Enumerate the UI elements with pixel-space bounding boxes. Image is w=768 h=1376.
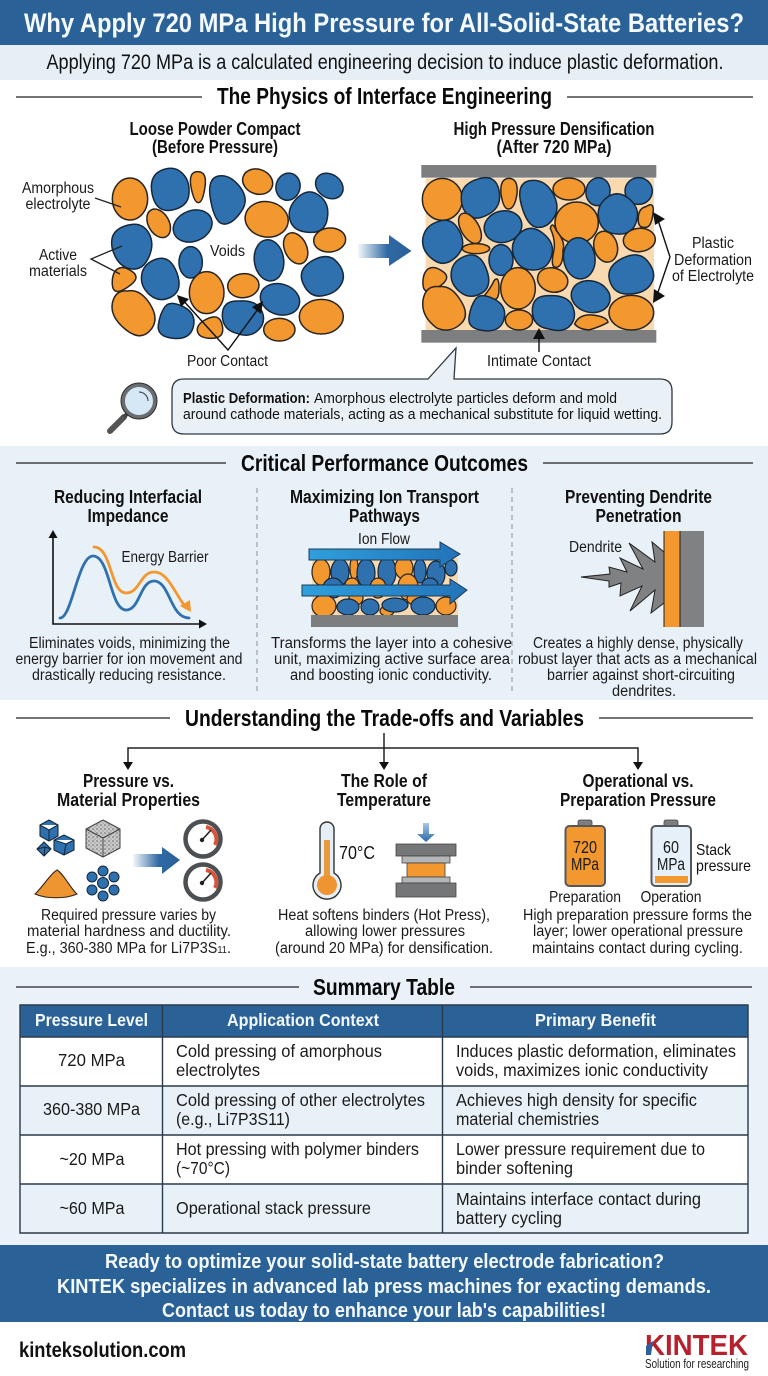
text: Eliminates voids, minimizing the	[29, 635, 230, 652]
heading: Maximizing Ion Transport	[290, 487, 479, 507]
row: 360-380 MPa	[43, 1090, 697, 1129]
call to action banner: Ready to optimize your solid-state battery electrode fabrication?	[105, 1251, 664, 1273]
text: dendrites.	[612, 683, 676, 700]
website url: kinteksolution.com	[19, 1339, 186, 1362]
section heading: outcomes: Critical Performance Outcomes	[241, 450, 528, 476]
text: Heat softens binders (Hot Press),	[278, 907, 490, 924]
icon: thermometer	[313, 822, 341, 899]
table header: Primary Benefit	[535, 1010, 656, 1030]
row: 20 MPa: ~20 MPa	[60, 1149, 125, 1169]
label: poor contact with arrows: Poor Contact	[187, 353, 269, 370]
icon: crystal cubes	[37, 820, 74, 856]
row: 20 MPa	[60, 1139, 705, 1178]
icon: operation battery: 60	[663, 837, 679, 857]
row: 20 MPa: (~70°C)	[176, 1158, 230, 1178]
icon: operation battery: MPa	[657, 854, 685, 874]
callout: plastic deformation: Plastic Deformation:	[183, 390, 310, 407]
heading: before pressure	[130, 119, 301, 157]
row: 720 MPa: voids, maximizes ionic conductivity	[456, 1060, 708, 1080]
heading: after pressure: (After 720 MPa)	[496, 137, 612, 157]
heading: before pressure: (Before Pressure)	[152, 137, 278, 157]
icon: pressure gauge upper	[186, 822, 220, 856]
label: operation: Operation	[640, 889, 702, 906]
row: 720 MPa: Induces plastic deformation, eliminates	[456, 1041, 736, 1061]
table header: Application Context	[227, 1010, 379, 1030]
heading	[337, 771, 431, 810]
icon: particle cluster	[87, 866, 119, 901]
label: active materials	[29, 246, 122, 280]
row: 20 MPa: binder softening	[456, 1158, 573, 1178]
diagram: ion flow through layer	[302, 531, 467, 627]
heading: Pathways	[349, 506, 420, 526]
column: pressure vs material properties	[26, 771, 231, 957]
text	[523, 907, 752, 957]
heading: Reducing Interfacial	[54, 487, 202, 507]
diagram: loose particles	[112, 165, 348, 341]
icon: porous cube	[86, 820, 120, 857]
text	[271, 635, 512, 684]
table header	[20, 1005, 748, 1037]
icon: magnifying glass	[110, 383, 157, 431]
subtitle band	[0, 45, 768, 80]
row: 360-380 MPa: 360-380 MPa	[43, 1099, 140, 1119]
heading: Operational vs.	[582, 771, 694, 791]
text	[275, 907, 493, 957]
diagram: compressed particles between plates	[421, 165, 656, 343]
icon: powder pile	[35, 870, 77, 898]
text: barrier against short-circuiting	[547, 667, 735, 684]
text: allowing lower pressures	[305, 923, 465, 940]
text: Transforms the layer into a cohesive	[271, 635, 512, 652]
row: 20 MPa: Hot pressing with polymer binders	[176, 1139, 419, 1159]
section heading: summary table: Summary Table	[313, 974, 455, 1000]
heading	[565, 487, 712, 526]
label: plastic deformation of electrolyte: of Electrolyte	[672, 268, 754, 285]
panel: high pressure densification	[421, 119, 754, 370]
diagram: ion flow through layer: Ion Flow	[358, 531, 411, 548]
chart: energy barrier curves: Energy Barrier	[122, 549, 208, 566]
text: maintains contact during cycling.	[532, 940, 743, 957]
title banner	[0, 0, 768, 45]
heading: Impedance	[88, 506, 168, 526]
row: 360-380 MPa: (e.g., Li7P3S11)	[176, 1109, 290, 1129]
heading: Penetration	[596, 506, 682, 526]
row: 60 MPa: Operational stack pressure	[176, 1198, 371, 1218]
panel: critical performance outcomes	[0, 446, 768, 700]
icon: preparation battery	[566, 820, 605, 886]
heading: after pressure	[454, 119, 654, 157]
table header: Pressure Level	[35, 1010, 148, 1030]
heading: Preventing Dendrite	[565, 487, 712, 507]
text: (around 20 MPa) for densification.	[275, 940, 493, 957]
heading: Material Properties	[57, 790, 200, 810]
label: intimate contact: Intimate Contact	[487, 353, 592, 370]
row: 720 MPa: 720 MPa	[58, 1050, 125, 1070]
row: 60 MPa	[60, 1189, 701, 1228]
label: active materials: materials	[29, 263, 87, 280]
text: Required pressure varies by	[41, 907, 216, 924]
icon: preparation battery: 720	[573, 837, 597, 857]
text	[518, 635, 757, 700]
label: intimate contact	[487, 328, 592, 370]
text: E.g., 360-380 MPa for Li7P3S11.	[26, 940, 231, 957]
text: energy barrier for ion movement and	[16, 651, 242, 668]
call to action banner	[0, 1245, 768, 1322]
label: preparation: Preparation	[549, 889, 621, 906]
row: 360-380 MPa: material chemistries	[456, 1109, 599, 1129]
text	[16, 635, 242, 684]
label: poor contact with arrows	[177, 295, 269, 370]
heading	[560, 771, 716, 810]
callout: plastic deformation: around cathode materials, acting as a mechanical substitute for liquid wetting.	[183, 406, 662, 423]
row: 720 MPa: electrolytes	[176, 1060, 260, 1080]
text: unit, maximizing active surface area	[274, 651, 510, 668]
heading: Temperature	[337, 790, 431, 810]
row: 360-380 MPa: Achieves high density for specific	[456, 1090, 697, 1110]
heading: The Role of	[341, 771, 428, 791]
text: and boosting ionic conductivity.	[290, 667, 492, 684]
row: 360-380 MPa: Cold pressing of other electrolytes	[176, 1090, 425, 1110]
icon: hot press	[396, 823, 456, 897]
arrow: materials to pressure	[133, 847, 180, 874]
label: plastic deformation of electrolyte: Deformation	[674, 252, 752, 269]
column: maximizing ion transport	[271, 487, 512, 684]
panel: loose powder compact	[22, 119, 348, 370]
icon: pressure gauge lower	[186, 864, 220, 900]
text	[26, 907, 231, 957]
heading	[54, 487, 202, 526]
column: reducing interfacial impedance	[16, 487, 242, 684]
text: layer; lower operational pressure	[533, 923, 743, 940]
label: stack pressure: pressure	[696, 858, 751, 875]
heading: after pressure: High Pressure Densification	[454, 119, 654, 139]
label: plastic deformation of electrolyte: Plastic	[692, 235, 734, 252]
label: 70 degrees: 70°C	[339, 842, 375, 863]
diagram: dendrite against barrier	[569, 531, 704, 627]
diagram: dendrite against barrier: Dendrite	[569, 539, 622, 556]
arrow: loose to dense	[358, 235, 412, 266]
chart: energy barrier curves	[48, 530, 208, 628]
heading	[290, 487, 479, 526]
heading: before pressure: Loose Powder Compact	[130, 119, 301, 139]
row: 720 MPa	[58, 1041, 736, 1080]
heading: Preparation Pressure	[560, 790, 716, 810]
icon: preparation battery: MPa	[571, 854, 599, 874]
label: plastic deformation of electrolyte	[653, 212, 754, 303]
column: role of temperature	[275, 771, 493, 957]
text: material hardness and ductility.	[27, 923, 231, 940]
row: 60 MPa: Maintains interface contact during	[456, 1189, 701, 1209]
label: amorphous electrolyte	[22, 180, 121, 213]
label: stack pressure	[696, 842, 751, 875]
arrows: branching tree	[123, 733, 643, 770]
icon: operation battery	[652, 820, 691, 886]
label: voids: Voids	[210, 243, 245, 260]
label: active materials: Active	[39, 247, 77, 264]
logo: kintek: KINTEK	[645, 1330, 748, 1362]
row: 720 MPa: Cold pressing of amorphous	[176, 1041, 382, 1061]
row: 60 MPa: ~60 MPa	[60, 1198, 125, 1218]
heading: Pressure vs.	[83, 771, 174, 791]
text: Creates a highly dense, physically	[533, 635, 743, 652]
label: stack pressure: Stack	[696, 842, 732, 859]
section heading: trade-offs and variables: Understanding the Trade-offs and Variables	[185, 705, 584, 731]
text: drastically reducing resistance.	[32, 667, 226, 684]
call to action banner: KINTEK specializes in advanced lab press machines for exacting demands.	[57, 1276, 711, 1298]
label: amorphous electrolyte: Amorphous	[22, 180, 94, 197]
column: operational vs preparation pressure	[523, 771, 752, 957]
panel: summary table	[0, 967, 768, 1245]
row: 20 MPa: Lower pressure requirement due to	[456, 1139, 705, 1159]
callout: plastic deformation	[172, 348, 672, 434]
call to action banner: Contact us today to enhance your lab's capabilities!	[162, 1300, 606, 1322]
row: 60 MPa: battery cycling	[456, 1208, 562, 1228]
label: amorphous electrolyte: electrolyte	[26, 196, 90, 213]
callout: plastic deformation: Amorphous electrolyte particles deform and mold	[314, 390, 617, 407]
column: preventing dendrite penetration	[518, 487, 757, 700]
table	[20, 1005, 748, 1233]
section heading: physics of interface engineering: The Physics of Interface Engineering	[217, 83, 552, 109]
text: High preparation pressure forms the	[523, 907, 752, 924]
heading	[57, 771, 200, 810]
